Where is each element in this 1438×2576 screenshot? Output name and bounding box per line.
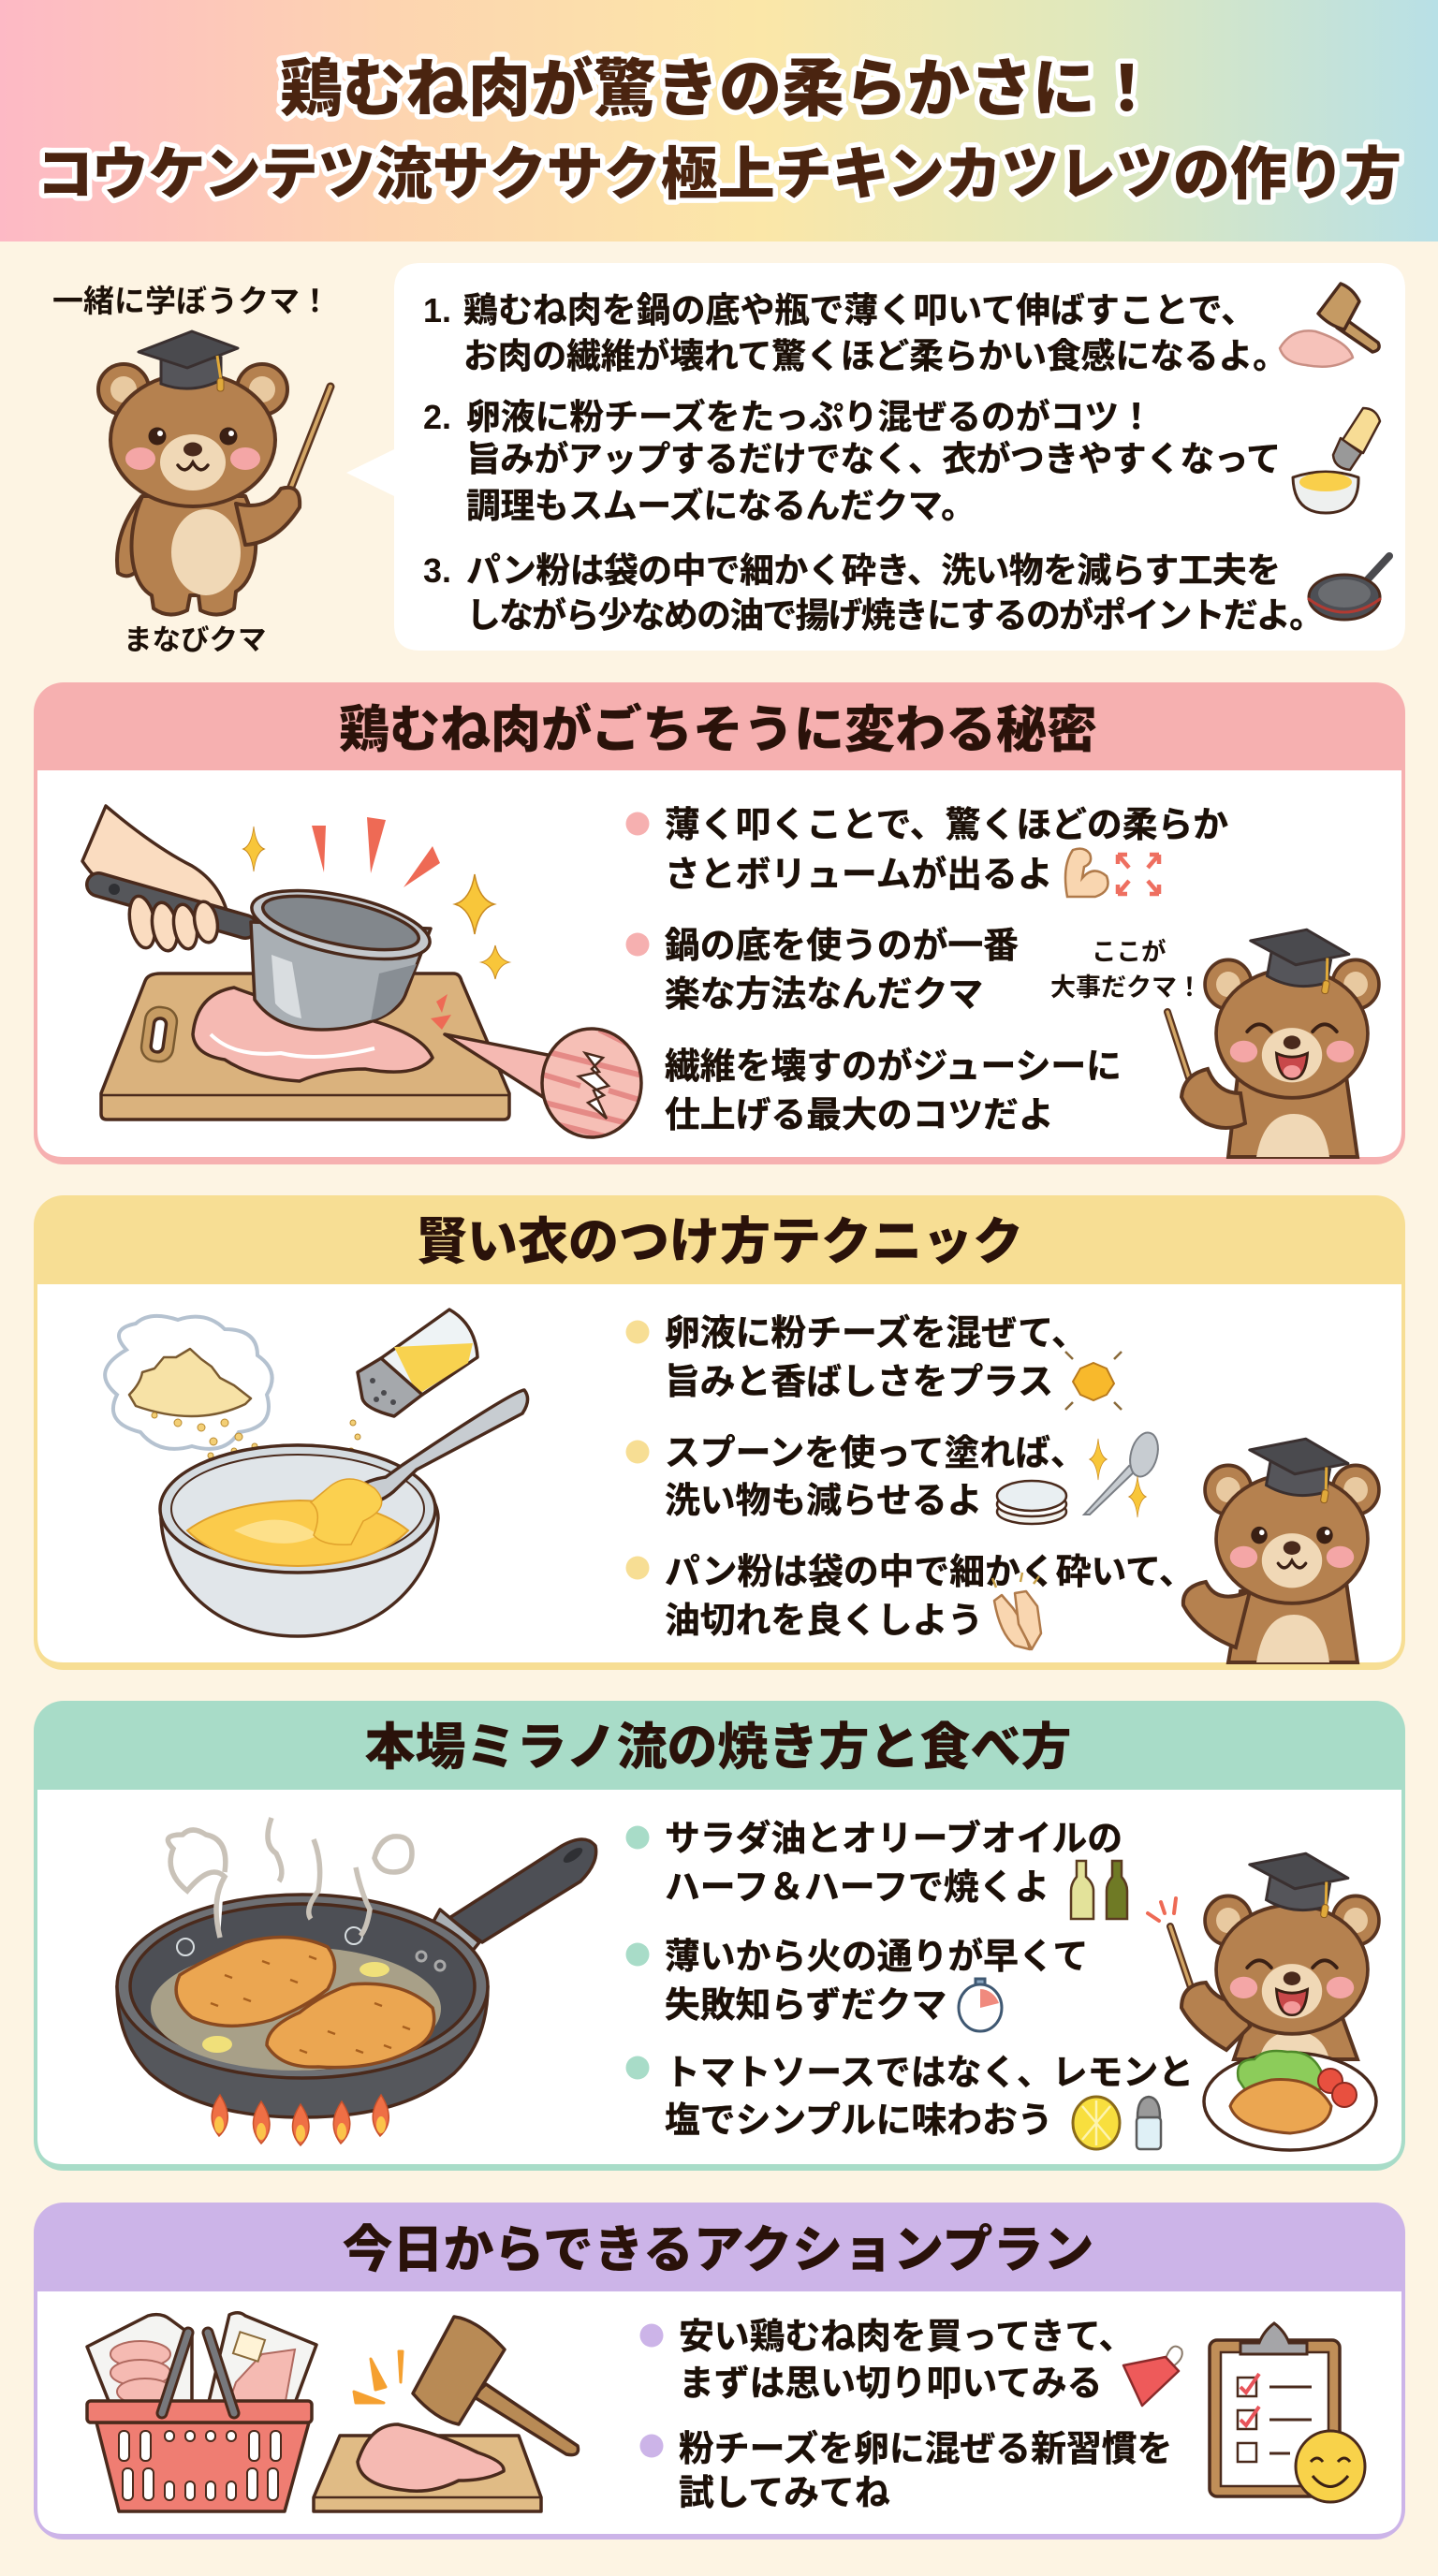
icon: oil bottles xyxy=(1071,1861,1127,1919)
plated cutlet with salad xyxy=(1204,2051,1376,2150)
icon: mallet and chicken xyxy=(1280,284,1379,367)
tip 1: お肉の繊維が壊れて驚くほど柔らかい食感になるよ。 xyxy=(463,337,1287,375)
bullet list: 失敗知らずだクマ xyxy=(665,1986,946,2026)
panel: 本場ミラノ流の焼き方と食べ方 xyxy=(34,1701,1405,2171)
tip 2 xyxy=(423,398,1281,525)
tip 1 xyxy=(423,291,1287,375)
bullet list: トマトソースではなく、レモンと xyxy=(665,2054,1194,2093)
illustration: cheese cloud, shaker, bowl and spoon xyxy=(105,1310,528,1636)
icon: plates xyxy=(997,1481,1066,1524)
bear remark: 大事だクマ！ xyxy=(1050,973,1202,1002)
tip 3: しながら少なめの油で揚げ焼きにするのがポイントだよ。 xyxy=(466,596,1324,635)
bullet list: スプーンを使って塗れば、 xyxy=(665,1434,1086,1473)
tip 3: 3. xyxy=(423,551,451,590)
bullet list: 繊維を壊すのがジューシーに xyxy=(665,1047,1122,1087)
heading: 賢い衣のつけ方テクニック xyxy=(417,1214,1023,1270)
bullet list: まずは思い切り叩いてみる xyxy=(679,2364,1102,2404)
speech bubble with three tips xyxy=(346,263,1405,651)
illustration: pounding chicken with a pot xyxy=(82,806,655,1147)
bullet list: 試してみてね xyxy=(679,2474,890,2513)
icon: expand arrows xyxy=(1118,855,1159,894)
bullet list: 薄く叩くことで、驚くほどの柔らか xyxy=(665,806,1228,845)
bullet list: 油切れを良くしよう xyxy=(665,1602,983,1641)
bullet list: 鍋の底を使うのが一番 xyxy=(665,927,1019,966)
title line 1: 鶏むね肉が驚きの柔らかさに！ xyxy=(280,54,1158,124)
bullet list: 粉チーズを卵に混ぜる新習慣を xyxy=(679,2430,1172,2469)
icon: stopwatch xyxy=(959,1979,1002,2031)
bullet list xyxy=(625,806,1228,1135)
icon: clapping hands xyxy=(992,1573,1041,1649)
bullet list: 塩でシンプルに味わおう xyxy=(665,2101,1053,2141)
icon: spoon xyxy=(1084,1429,1163,1517)
magnified fibres callout xyxy=(445,1029,655,1147)
panel: 賢い衣のつけ方テクニック xyxy=(34,1195,1405,1670)
tip 2: 調理もスムーズになるんだクマ。 xyxy=(466,487,976,525)
illustration: mallet, board and chicken xyxy=(314,2317,579,2511)
title banner xyxy=(0,0,1438,242)
bullet list: ハーフ＆ハーフで焼くよ xyxy=(665,1868,1049,1908)
bullet list: さとボリュームが出るよ xyxy=(665,856,1053,895)
bear: pointing with surprise marks xyxy=(1148,1844,1379,2059)
bear remark: ここが xyxy=(1092,938,1167,966)
steam xyxy=(168,1818,412,1938)
bear remark xyxy=(1050,938,1202,1002)
icon: checklist clipboard with smiley xyxy=(1210,2323,1365,2502)
tip 2: 旨みがアップするだけでなく、衣がつきやすくなって xyxy=(466,440,1281,478)
bullet list: 旨みと香ばしさをプラス xyxy=(665,1363,1053,1402)
burner flames xyxy=(212,2095,389,2145)
icon: lemon xyxy=(1073,2097,1120,2149)
bullet list: 仕上げる最大のコツだよ xyxy=(665,1096,1054,1135)
tip 3: パン粉は袋の中で細かく砕き、洗い物を減らす工夫を xyxy=(466,551,1281,590)
mascot bear with pointer xyxy=(98,331,330,615)
bear caption: 一緒に学ぼうクマ: 一緒に学ぼうクマ！ xyxy=(52,284,330,318)
icon: price tag xyxy=(1123,2347,1182,2406)
tip 1: 1. xyxy=(423,291,451,329)
heading: 本場ミラノ流の焼き方と食べ方 xyxy=(365,1720,1071,1776)
bullet list: サラダ油とオリーブオイルの xyxy=(665,1819,1123,1859)
heading: 鶏むね肉がごちそうに変わる秘密 xyxy=(339,701,1097,758)
bear: waving xyxy=(1183,1429,1379,1662)
icon: muscle arm xyxy=(1065,849,1108,897)
bullet list: 安い鶏むね肉を買ってきて、 xyxy=(679,2318,1134,2357)
bullet list: 薄いから火の通りが早くて xyxy=(665,1938,1088,1977)
tip 2: 2. xyxy=(423,398,451,436)
bullet list: 卵液に粉チーズを混ぜて、 xyxy=(665,1314,1087,1354)
bear: pointing xyxy=(1167,920,1379,1157)
tip 1: 鶏むね肉を鍋の底や瓶で薄く叩いて伸ばすことで、 xyxy=(463,291,1255,329)
icon: frying pan xyxy=(1309,556,1389,620)
bullet list: 楽な方法なんだクマ xyxy=(665,975,983,1015)
bullet list xyxy=(625,1819,1194,2141)
illustration: basket of chicken packs xyxy=(87,2313,316,2511)
bullet list xyxy=(640,2318,1172,2513)
bullet list: 洗い物も減らせるよ xyxy=(665,1482,982,1521)
panel: 鶏むね肉がごちそうに変わる秘密 xyxy=(34,682,1405,1164)
heading: 今日からできるアクションプラン xyxy=(343,2222,1093,2278)
bullet list: パン粉は袋の中で細かく砕いて、 xyxy=(665,1553,1195,1592)
illustration: frying cutlets in a pan xyxy=(117,1818,596,2145)
tip 3 xyxy=(423,551,1324,635)
icon: cheese shaker and egg bowl xyxy=(1293,408,1380,513)
icon: cheese burst xyxy=(1065,1352,1122,1410)
panel: 今日からできるアクションプラン xyxy=(34,2203,1405,2539)
bullet list xyxy=(625,1314,1195,1641)
icon: salt shaker xyxy=(1137,2097,1161,2149)
bear name: まなびクマ: まなびクマ xyxy=(124,624,266,656)
tip 2: 卵液に粉チーズをたっぷり混ぜるのがコツ！ xyxy=(466,398,1153,436)
title line 2: コウケンテツ流サクサク極上チキンカツレツの作り方 xyxy=(37,142,1401,206)
